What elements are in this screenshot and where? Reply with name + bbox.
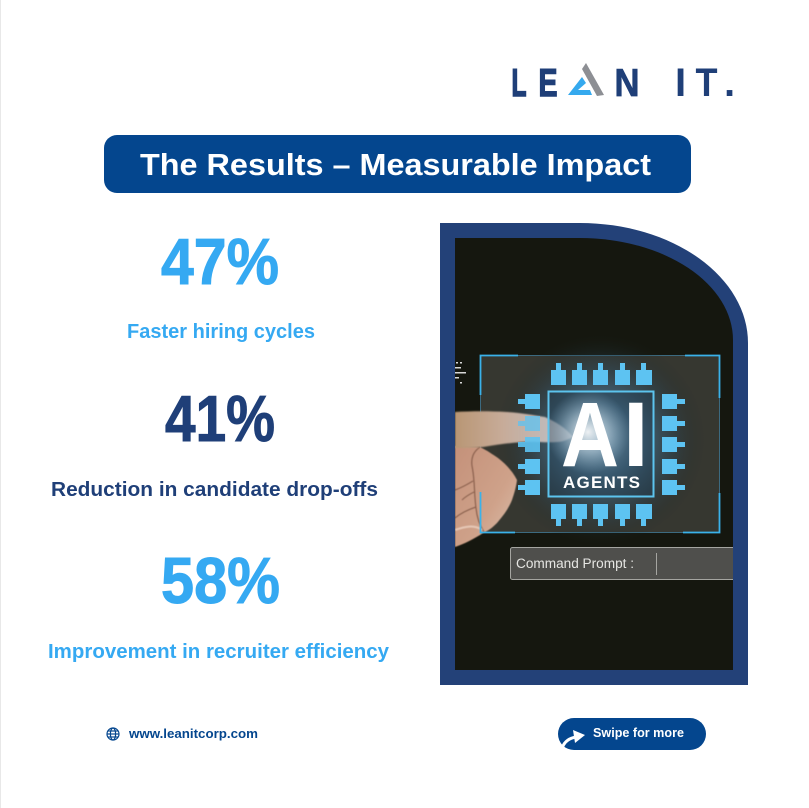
- logo: LEAN IT.: I: [675, 61, 686, 105]
- stat: 58% improvement in recruiter efficiency: 58%: [161, 544, 280, 617]
- chip left pins: [518, 394, 540, 495]
- stat: 47% faster hiring cycles: 47%: [161, 225, 279, 298]
- title banner: The Results – Measurable Impact: [140, 147, 651, 182]
- website link: www.leanitcorp.com: [128, 726, 258, 741]
- glass panel: [480, 356, 720, 532]
- glow: [517, 348, 683, 533]
- stat: 58% improvement in recruiter efficiency: Improvement in recruiter efficiency: [48, 641, 390, 663]
- stat: 41% reduction in candidate drop-offs: [51, 382, 378, 501]
- command prompt box: Command Prompt :: [516, 556, 634, 571]
- swipe button: Swipe for more: [593, 725, 684, 740]
- title banner: [104, 135, 691, 193]
- icon: globe: [107, 728, 119, 740]
- stat: 47% faster hiring cycles: [127, 225, 315, 343]
- corner brackets: [480, 356, 720, 532]
- AGENTS lettering: AGENTS: [563, 473, 640, 492]
- stat: 41% reduction in candidate drop-offs: 41%: [165, 382, 275, 455]
- photo frame: [440, 223, 748, 685]
- small interface marks: [455, 362, 466, 384]
- hand: [455, 446, 517, 547]
- chip outline: [548, 392, 654, 496]
- logo: LEAN IT.: T: [696, 61, 718, 105]
- chip right pins: [662, 394, 685, 495]
- image panel: AI agents photo: [440, 223, 750, 685]
- swipe button: [558, 718, 706, 750]
- logo: LEAN IT.: L: [512, 62, 526, 105]
- logo: LEAN IT.: [512, 61, 735, 105]
- chip bottom pins: [551, 504, 652, 526]
- stat: 47% faster hiring cycles: Faster hiring cycles: [127, 321, 315, 343]
- light core: [551, 393, 626, 470]
- photo contents: [455, 348, 733, 580]
- AI lettering: [563, 402, 642, 466]
- photo background: [455, 238, 733, 670]
- AI lettering: A: [561, 384, 619, 486]
- icon: curved arrow: [562, 730, 585, 747]
- stat: 41% reduction in candidate drop-offs: Reduction in candidate drop-offs: [51, 479, 378, 501]
- AI lettering: I: [623, 384, 649, 486]
- logo mark: stylised A: [568, 63, 604, 96]
- stat: 58% improvement in recruiter efficiency: [48, 544, 390, 663]
- logo: LEAN IT.: N: [614, 62, 640, 105]
- logo: LEAN IT.: .: [724, 61, 735, 105]
- logo: LEAN IT.: E: [538, 62, 558, 105]
- command prompt box: [510, 548, 750, 580]
- chip top pins: [551, 363, 652, 385]
- pointing finger: [455, 411, 573, 448]
